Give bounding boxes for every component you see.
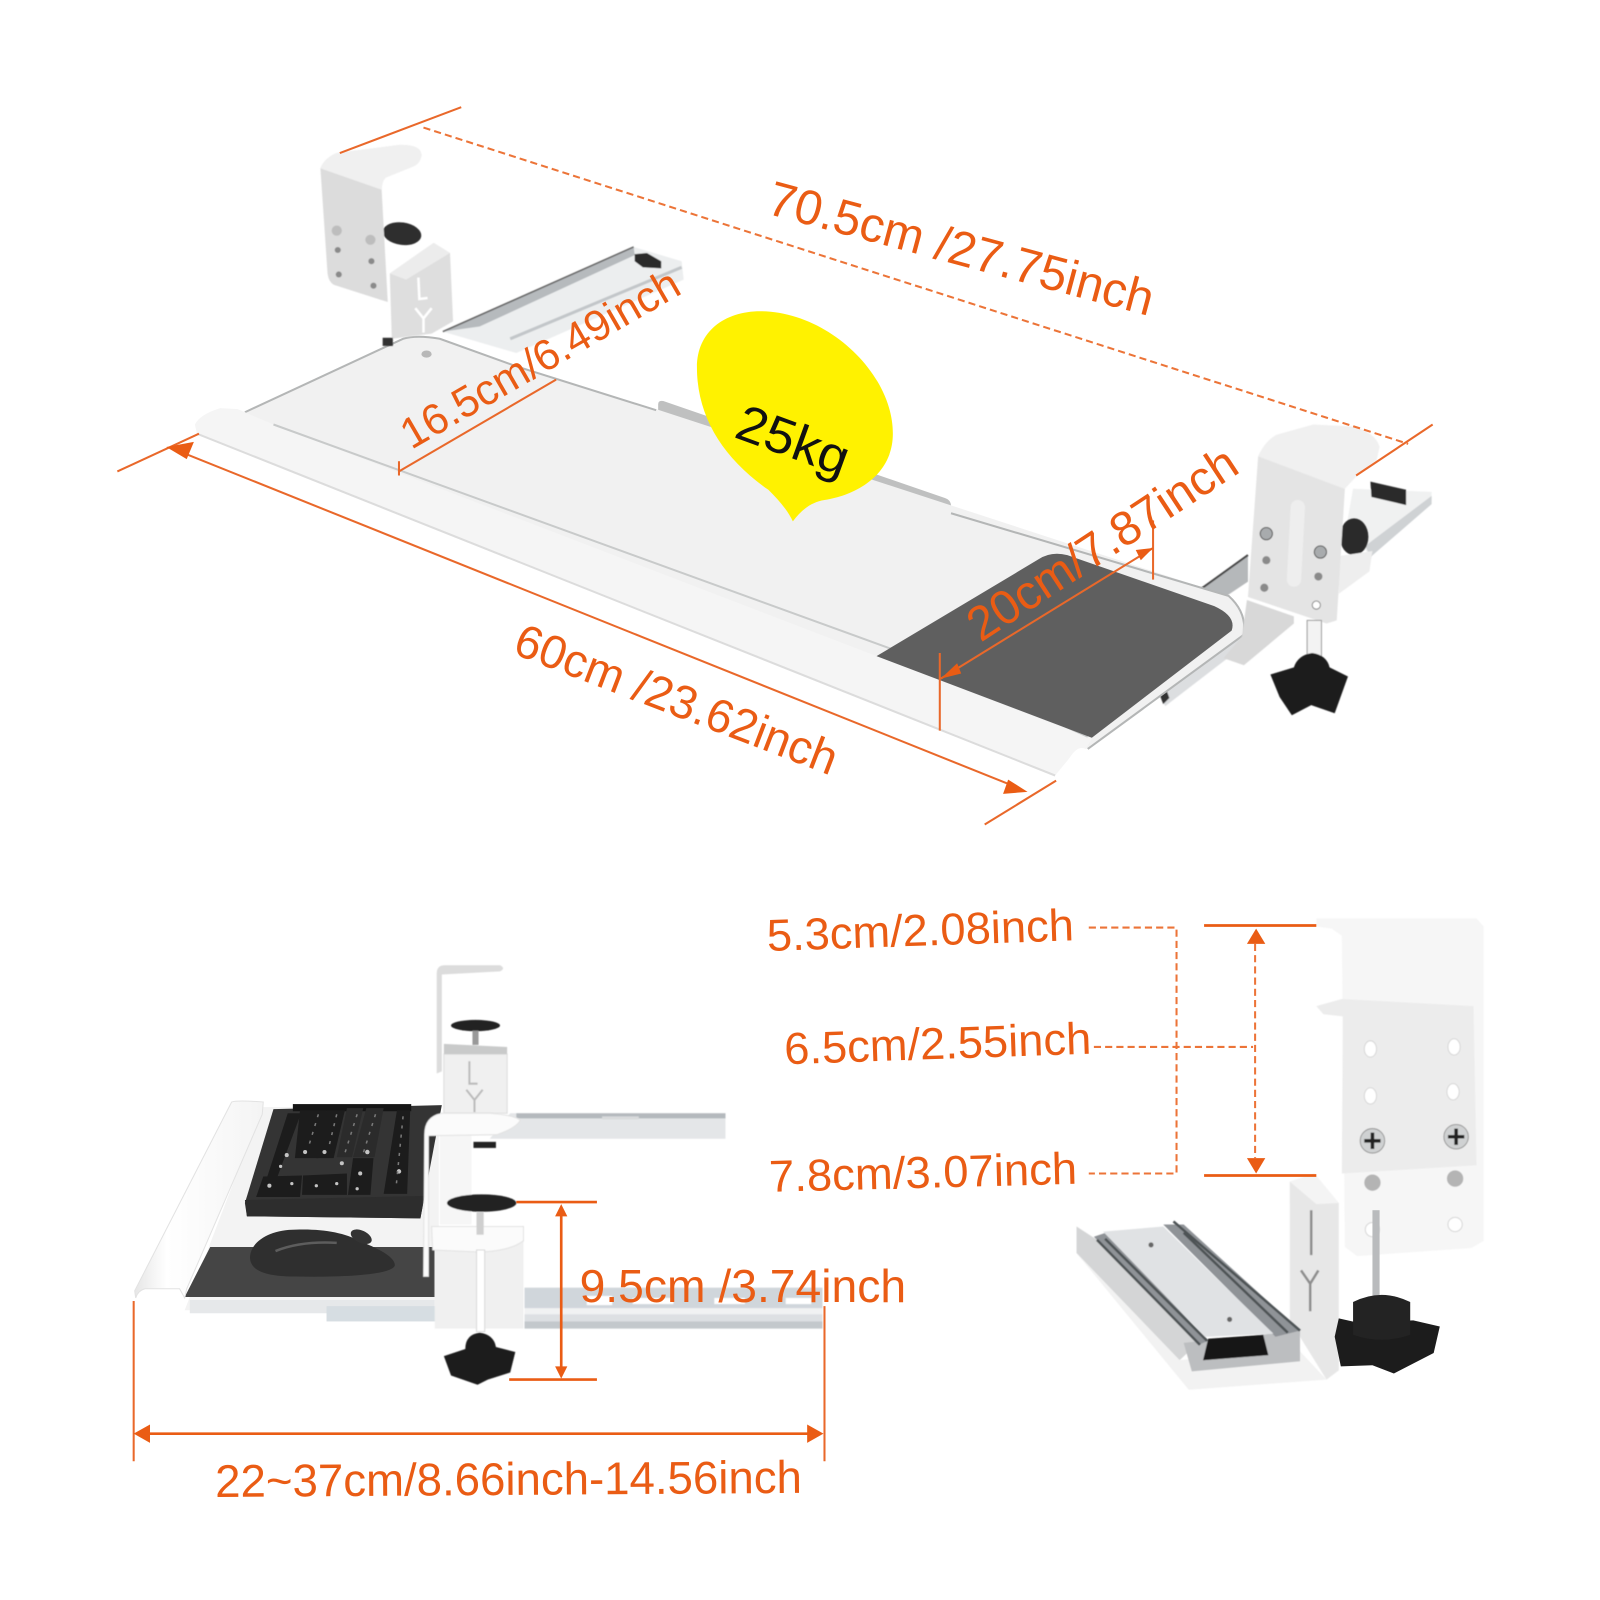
mouse xyxy=(250,1226,395,1277)
dimension: 22-37cm travel: 22~37cm/8.66inch-14.56inch xyxy=(215,1451,802,1507)
dimension: tray length 60cm: 60cm /23.62inch xyxy=(508,614,845,785)
back clamp flange xyxy=(444,1044,507,1054)
front clamp stem xyxy=(477,1212,485,1332)
rail grooves xyxy=(1097,1221,1300,1345)
dimension: total width 70.5cm: 70.5cm /27.75inch xyxy=(762,172,1160,327)
keyboard xyxy=(245,1104,442,1218)
screw stem xyxy=(1372,1210,1380,1296)
plate holes xyxy=(1364,1039,1462,1237)
tray deck xyxy=(185,1107,439,1310)
panel: keyboard tray top view xyxy=(117,107,1433,824)
tray rear edge xyxy=(245,337,1244,749)
front clamp vertical plate xyxy=(440,1133,471,1224)
dashed leader lines and labels: 6.5cm/2.55inch xyxy=(783,1013,1092,1074)
right clamp knob xyxy=(1340,518,1368,555)
back clamp bracket xyxy=(444,1054,507,1113)
lip and surface separator xyxy=(273,424,1088,737)
right clamp star knob xyxy=(1270,653,1348,715)
back left drawer rail xyxy=(443,247,684,353)
tray surface xyxy=(245,337,1244,749)
back clamp xyxy=(437,965,507,1113)
rail side bands xyxy=(1163,1224,1300,1337)
right clamp slot xyxy=(1286,500,1305,587)
right drawer rail xyxy=(1159,482,1432,706)
rail end housing xyxy=(1184,1331,1300,1371)
right clamp screw stem xyxy=(1307,620,1321,659)
clamp plate xyxy=(320,145,421,302)
front lip xyxy=(135,1101,263,1298)
panel: clamp detail view xyxy=(766,899,1484,1390)
star knob xyxy=(1335,1295,1440,1373)
back clamp knob xyxy=(451,1020,500,1031)
back clamp plate xyxy=(437,965,503,1073)
load label: 25kg xyxy=(729,394,858,487)
front clamp knob xyxy=(447,1194,516,1212)
plate screws xyxy=(1360,1124,1468,1153)
back clamp stem xyxy=(472,1031,479,1045)
plate gray holes xyxy=(1364,1170,1463,1191)
keyboard legend rows xyxy=(308,1114,403,1189)
clamp knob xyxy=(381,220,423,247)
clamp holes xyxy=(332,226,377,289)
mouse mat xyxy=(185,1247,435,1297)
dimension: mat depth 20cm: 20cm/7.87inch xyxy=(958,436,1248,652)
dimension: mat depth 20cm xyxy=(940,436,1248,731)
dashed leader lines and labels xyxy=(766,899,1253,1202)
drawer rail xyxy=(1077,1221,1300,1371)
right clamp screws xyxy=(1260,528,1327,558)
bracket slot mark xyxy=(1301,1210,1318,1311)
tray surface hole xyxy=(421,351,432,358)
dimension: 9.5cm clamp range: 9.5cm /3.74inch xyxy=(580,1260,906,1312)
dashed leader lines and labels: 5.3cm/2.08inch xyxy=(766,899,1075,961)
front lip xyxy=(195,408,1092,776)
dimension: 22-37cm travel xyxy=(134,1301,824,1507)
lip lower edge xyxy=(197,434,1055,776)
tray front strips xyxy=(190,1300,437,1321)
right clamp xyxy=(1223,424,1380,715)
keyboard function row xyxy=(293,1104,411,1111)
clamp lower bracket xyxy=(390,243,453,339)
dimension: tray length 60cm xyxy=(117,434,1056,824)
clamp slot arrow marks xyxy=(415,278,432,333)
back clamp slot mark xyxy=(466,1061,483,1112)
tray rear gray tab xyxy=(658,401,951,516)
right clamp flange xyxy=(1339,551,1372,594)
rail end opening xyxy=(1203,1335,1268,1360)
clamp foot xyxy=(383,338,393,346)
dimension: 9.5cm clamp range xyxy=(509,1202,906,1380)
panel: side view with keyboard xyxy=(134,965,906,1507)
front clamp star knob xyxy=(444,1333,515,1385)
rail center channel xyxy=(1103,1227,1273,1337)
dimension: total width 70.5cm xyxy=(340,107,1433,476)
keyboard legends xyxy=(267,1150,401,1190)
right clamp cap xyxy=(1258,424,1380,489)
right clamp holes xyxy=(1260,556,1322,609)
front rail xyxy=(524,1288,822,1329)
keyboard key blocks xyxy=(256,1108,410,1197)
front clamp lower bracket xyxy=(435,1240,523,1329)
mouse mat xyxy=(877,554,1233,738)
dimension: tray depth 16.5cm: 16.5cm/6.49inch xyxy=(392,260,688,459)
right clamp lower bracket xyxy=(1223,600,1294,665)
L bracket with rail base xyxy=(1077,1173,1339,1390)
front clamp cap xyxy=(423,1113,520,1277)
dashed leader lines and labels: 7.8cm/3.07inch xyxy=(768,1143,1078,1202)
clamp plate xyxy=(1316,918,1484,1256)
load callout bubble xyxy=(697,311,893,521)
rail ghost label xyxy=(587,1296,811,1305)
clamp height dimension arrow xyxy=(1204,926,1316,1176)
right clamp plate xyxy=(1248,456,1345,623)
left clamp xyxy=(320,145,453,346)
keyboard front band xyxy=(245,1196,424,1218)
front clamp black foot xyxy=(473,1142,496,1148)
clamp bracket top xyxy=(390,243,450,280)
back rail xyxy=(490,1113,726,1139)
front clamp flange xyxy=(432,1227,523,1252)
clamp cap top xyxy=(320,145,421,190)
inner plate xyxy=(1316,999,1477,1173)
front clamp xyxy=(423,1113,523,1385)
rail outer channel xyxy=(1077,1227,1198,1360)
